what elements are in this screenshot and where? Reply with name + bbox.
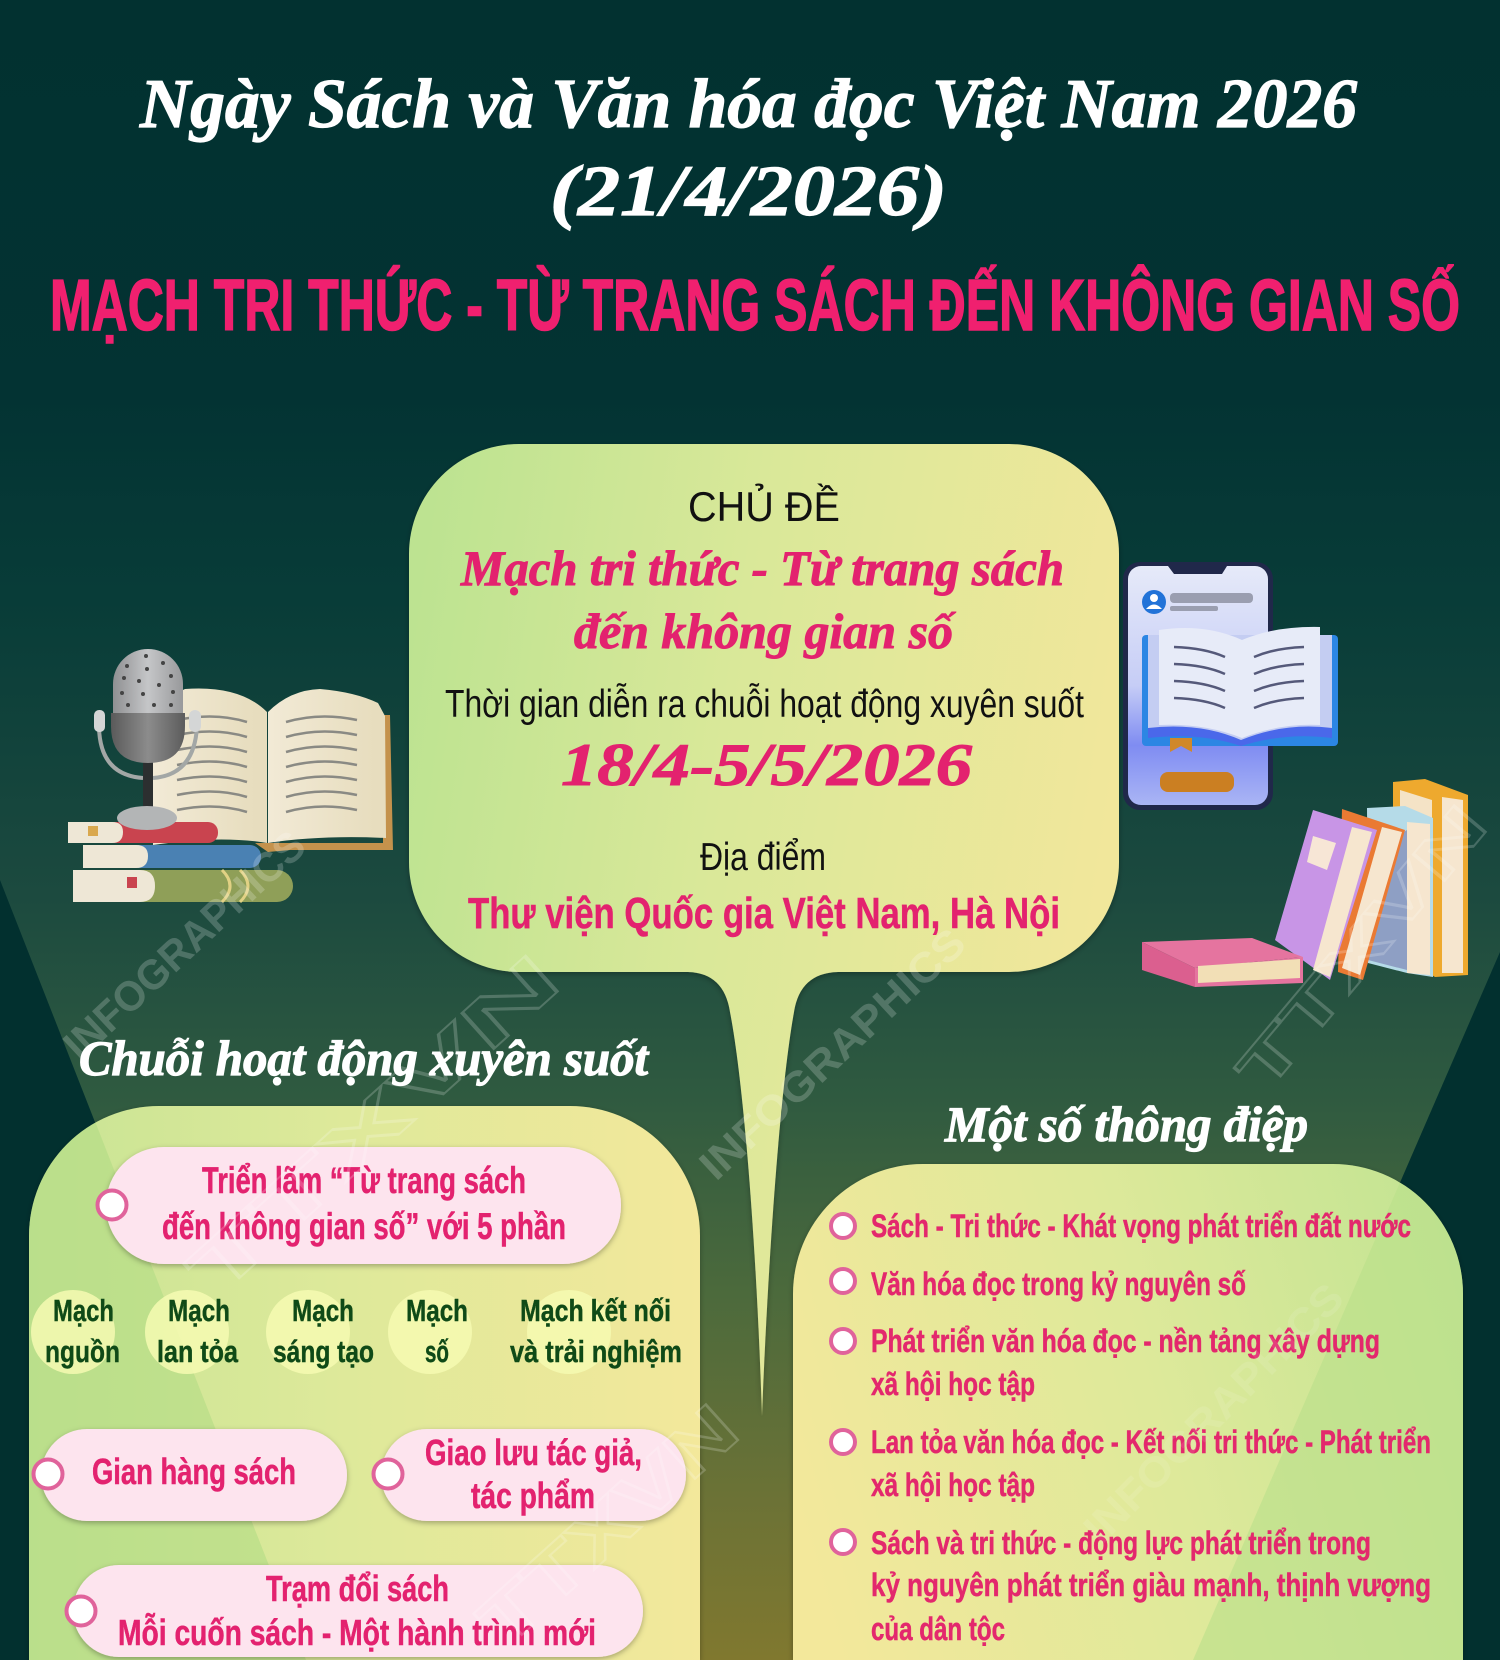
pill: author exchange [374, 1429, 686, 1521]
theme title [460, 540, 1064, 659]
section 1: nguồn [45, 1334, 120, 1369]
pink book [1142, 938, 1303, 987]
purple book [1275, 810, 1377, 980]
theme title: Mạch tri thức - Từ trang sách [460, 540, 1064, 596]
time label: Thời gian diễn ra chuỗi hoạt động xuyên suốt [445, 683, 1084, 726]
section 3 [266, 1290, 374, 1374]
section 1: Mạch [53, 1293, 114, 1328]
message 4: xã hội học tập [871, 1467, 1035, 1503]
pill: exhibition: Triển lãm “Từ trang sách [202, 1160, 526, 1201]
theme title: đến không gian số [574, 603, 956, 659]
watermarks [54, 792, 1500, 1660]
dark corner: bottom left [0, 880, 306, 1660]
section 2: Mạch [168, 1293, 230, 1328]
date: 18/4-5/5/2026 [561, 732, 972, 798]
watermarks: INFOGRAPHICS [690, 919, 974, 1189]
message 5: của dân tộc [871, 1611, 1005, 1647]
section 4: số [425, 1334, 449, 1369]
pill: author exchange: tác phẩm [471, 1475, 595, 1516]
message 3 [831, 1323, 1380, 1402]
open book on phone [1142, 627, 1338, 752]
watermarks: TTXVN [173, 939, 574, 1311]
panel: theme speech bubble [409, 444, 1119, 1416]
section 4: Mạch [406, 1293, 468, 1328]
watermarks: TTXVN [1224, 792, 1500, 1103]
five sections [31, 1290, 682, 1374]
message 3: xã hội học tập [871, 1366, 1035, 1402]
pill: book exchange station: Mỗi cuốn sách - Một hành trình mới [118, 1612, 596, 1653]
dark corner: bottom right [1193, 952, 1500, 1660]
orange book [1338, 809, 1405, 980]
heading: messages: Một số thông điệp [944, 1096, 1308, 1152]
panel: messages [793, 1164, 1463, 1660]
light blue book [1367, 806, 1433, 977]
pill: book stalls: Gian hàng sách [92, 1451, 296, 1492]
label: chủ đề: CHỦ ĐỀ [688, 482, 840, 530]
pill: book exchange station [66, 1565, 643, 1657]
panel background [29, 1106, 700, 1660]
message 2: Văn hóa đọc trong kỷ nguyên số [871, 1266, 1246, 1302]
icon: phone with open book [1123, 562, 1338, 810]
section 1 [31, 1290, 120, 1374]
venue: Thư viện Quốc gia Việt Nam, Hà Nội [468, 889, 1060, 938]
title line 2: (21/4/2026) [550, 151, 947, 231]
message 4 [831, 1424, 1431, 1503]
title block [50, 66, 1460, 346]
book stack [68, 822, 293, 902]
pill: book exchange station: Trạm đổi sách [266, 1568, 449, 1609]
icon: microphone, open book and book stack [68, 649, 393, 902]
pill: book stalls [34, 1429, 347, 1521]
title line 1: Ngày Sách và Văn hóa đọc Việt Nam 2026 [139, 66, 1357, 143]
phone [1123, 562, 1273, 810]
section 4 [388, 1290, 472, 1374]
watermarks: INFOGRAPHICS [1074, 1274, 1353, 1552]
yellow book [1393, 779, 1468, 977]
section 3: sáng tạo [273, 1334, 374, 1369]
section 5: Mạch kết nối [520, 1293, 671, 1328]
panel shade [29, 1106, 306, 1660]
section 2 [145, 1290, 239, 1374]
panel: activities [29, 1106, 700, 1660]
heading: activities: Chuỗi hoạt động xuyên suốt [79, 1030, 650, 1086]
message 5 [831, 1525, 1431, 1647]
watermarks: TTXVN [463, 1389, 753, 1660]
section 5 [510, 1290, 682, 1374]
bubble shape [409, 444, 1119, 1416]
venue label: Địa điểm [700, 836, 826, 879]
microphone [94, 649, 201, 830]
section 5: và trải nghiệm [510, 1334, 682, 1369]
open book [153, 688, 393, 852]
icon: leaning books [1142, 779, 1468, 987]
panel background [793, 1164, 1463, 1660]
panel shade [1193, 1164, 1463, 1660]
watermarks: INFOGRAPHICS [54, 821, 314, 1069]
section 2: lan tỏa [157, 1334, 239, 1369]
section 3: Mạch [292, 1293, 354, 1328]
pill: author exchange: Giao lưu tác giả, [425, 1432, 642, 1473]
pill: exhibition [98, 1147, 621, 1264]
pill: exhibition: đến không gian số” với 5 phần [162, 1206, 566, 1247]
